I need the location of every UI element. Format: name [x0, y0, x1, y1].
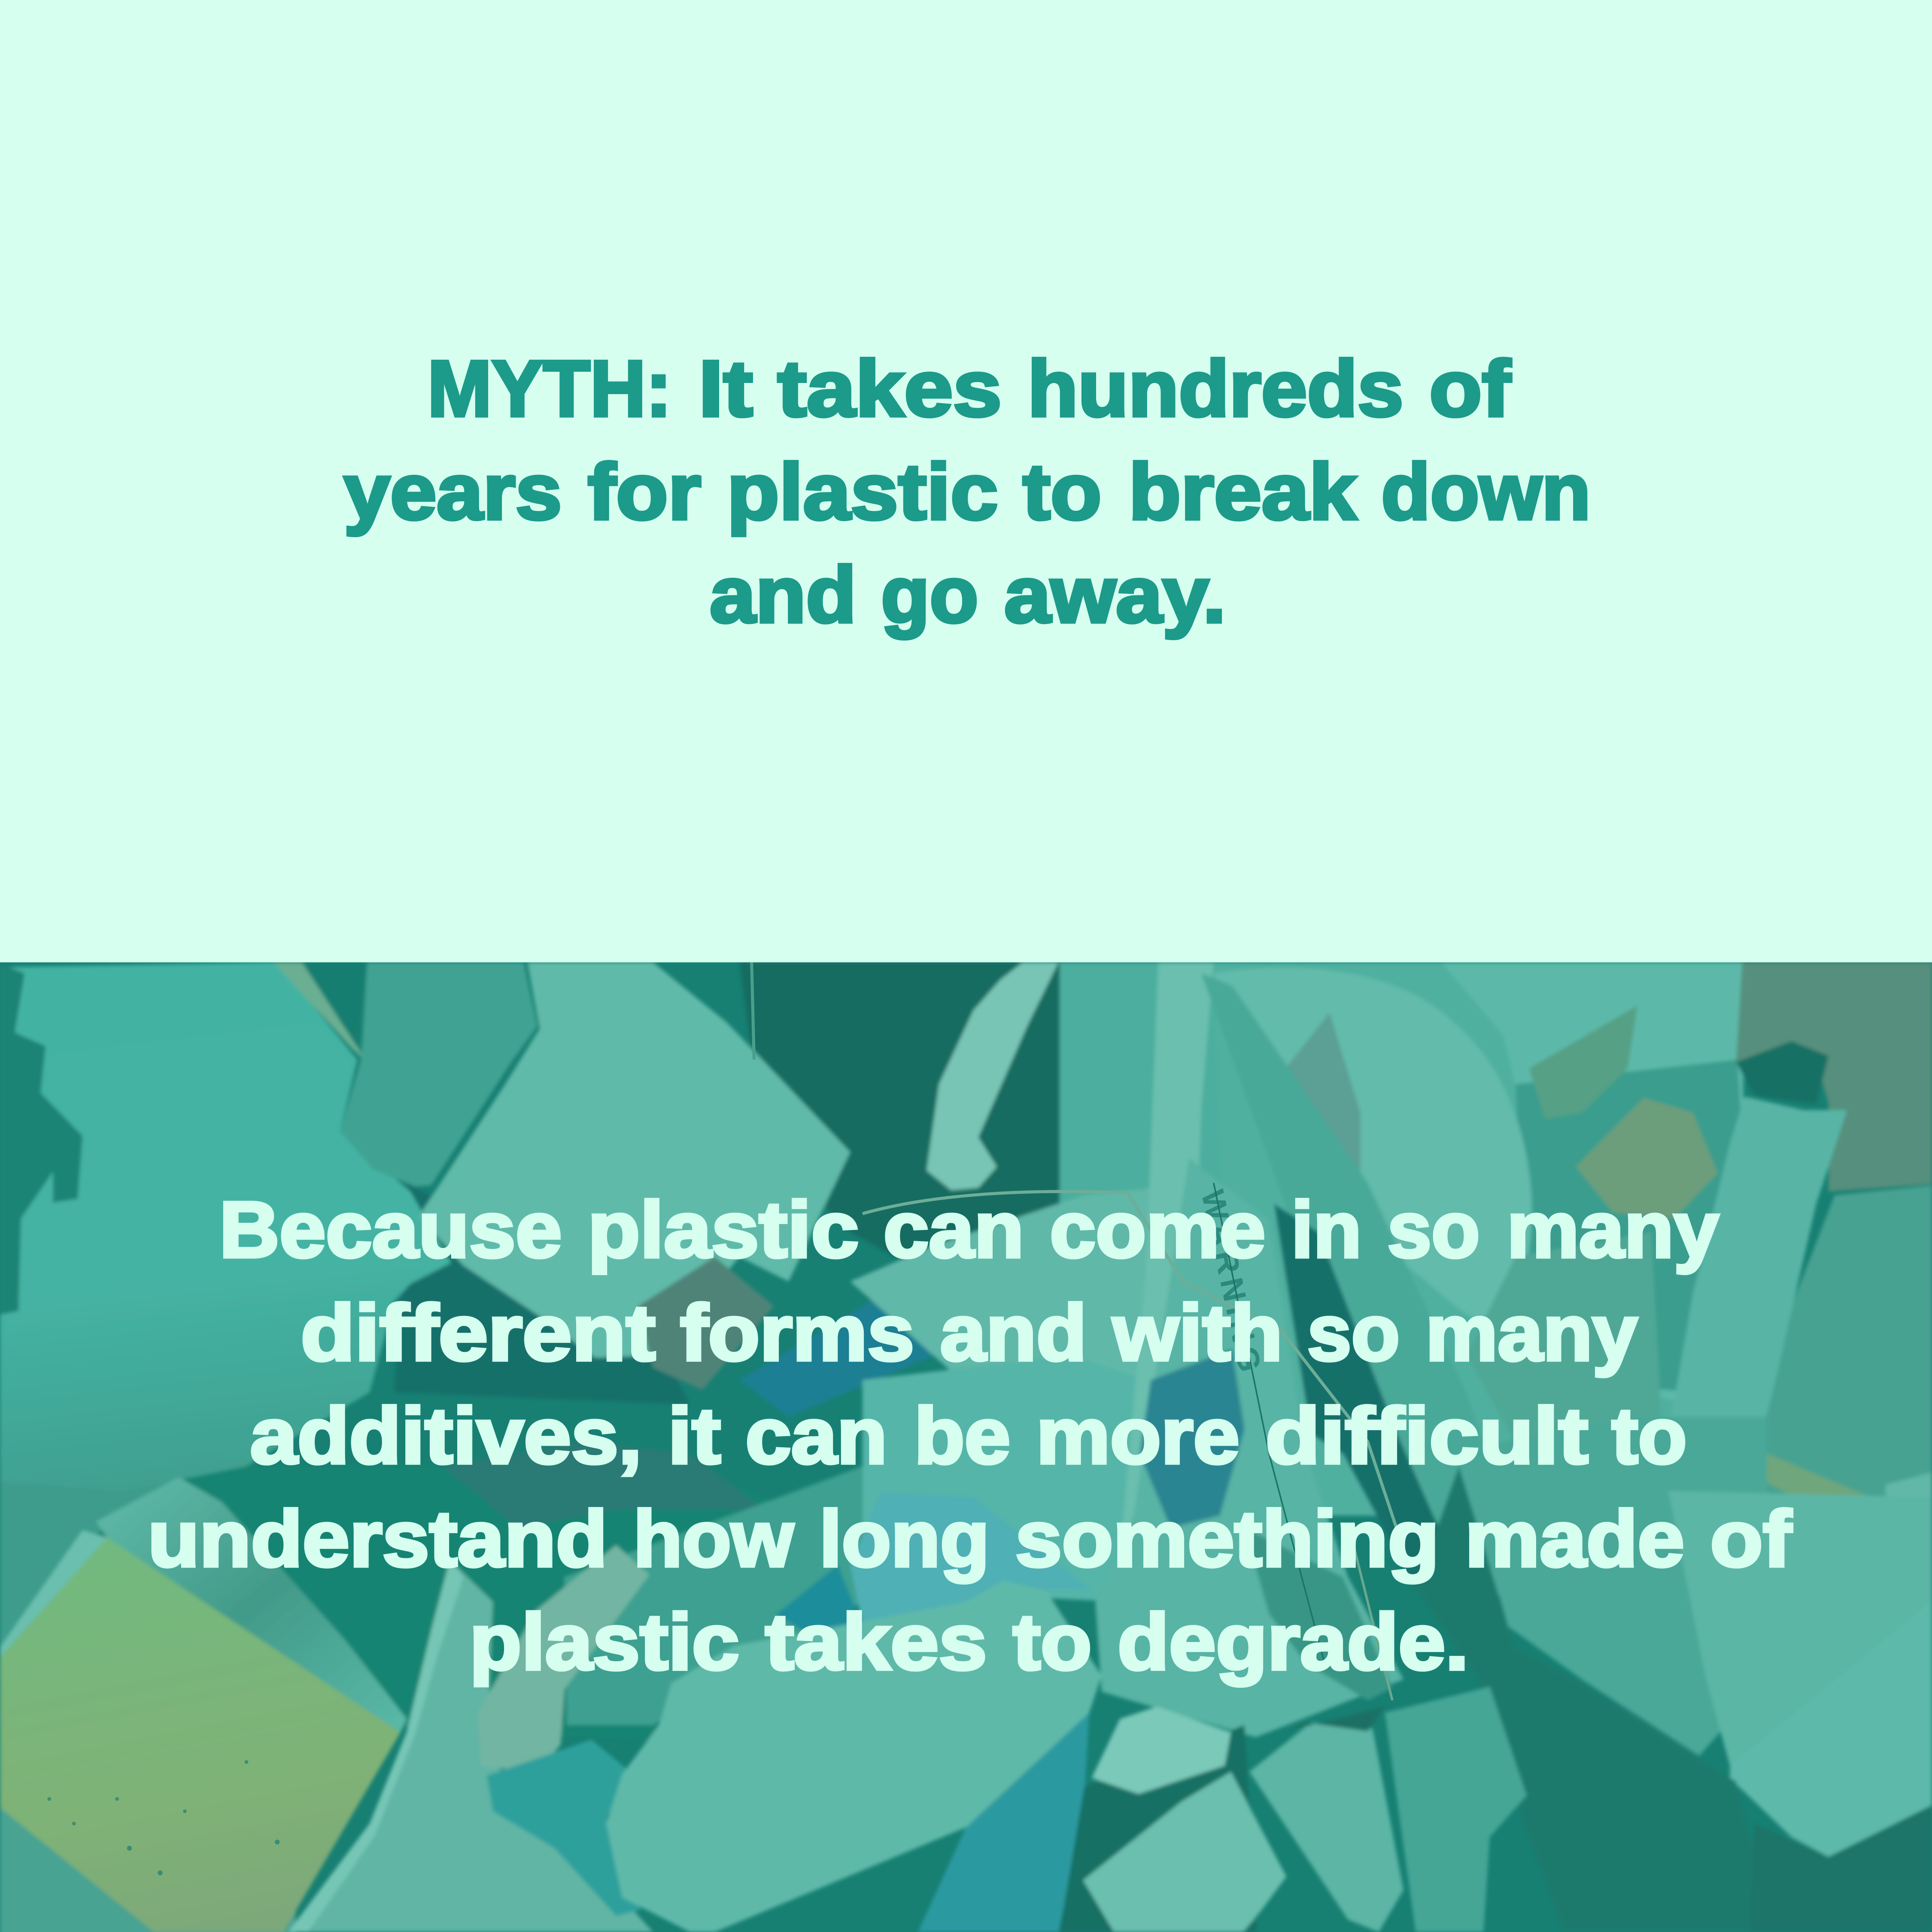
debris: label paper with print [1095, 1158, 1403, 1738]
debris: red fragment [638, 1257, 774, 1390]
debris: blue bag [918, 1713, 1089, 1932]
debris: printed word on paper: WARNING [1195, 1187, 1268, 1375]
body text: difficult [1265, 1391, 1588, 1480]
body text: different [301, 1288, 656, 1377]
top panel: pale mint background [0, 0, 1932, 962]
debris: brush and pale paper [1459, 1417, 1767, 1756]
debris: yellow shard [1529, 1005, 1637, 1119]
body text: and [940, 1288, 1087, 1377]
debris: twig [927, 962, 1058, 1190]
debris: yellow sponge [0, 1538, 401, 1932]
body text: to [1013, 1598, 1092, 1686]
body text: takes [765, 1598, 987, 1686]
debris: popcorn foam [1092, 1707, 1231, 1794]
myth heading [344, 344, 1591, 639]
body text: to [1612, 1391, 1687, 1480]
myth heading: go [881, 550, 978, 639]
body text: plastic [588, 1185, 859, 1274]
debris: tube [1249, 1722, 1403, 1932]
debris: dark textured foam [1416, 1466, 1761, 1932]
debris: ribbon and dark strip [1201, 973, 1540, 1602]
body text: more [1036, 1391, 1239, 1480]
debris: left wedge and rim [96, 1477, 407, 1732]
body text: many [1425, 1288, 1637, 1377]
body text: Because [219, 1185, 562, 1274]
body text [148, 1185, 1792, 1686]
debris: large round dish [1214, 968, 1532, 1321]
body text: degrade. [1118, 1598, 1469, 1686]
body text: in [1291, 1185, 1361, 1274]
debris: pale slab [1385, 1687, 1527, 1932]
debris: speckles on sponge [47, 1760, 279, 1875]
debris: large left ball [0, 962, 451, 1491]
body text: additives, [250, 1391, 642, 1480]
body text: can [884, 1185, 1024, 1274]
debris: torn dark patch on ball [0, 963, 82, 1315]
debris: deep background zones [97, 1479, 659, 1741]
debris: dark gaps at bottom [1060, 1725, 1257, 1932]
myth heading: break [1129, 447, 1357, 536]
body text: how [633, 1495, 794, 1583]
debris: brown card, top right [1736, 962, 1932, 1191]
body text: it [668, 1391, 721, 1480]
myth heading: years [344, 447, 562, 536]
body text: be [914, 1391, 1010, 1480]
body text: so [1388, 1185, 1480, 1274]
body text: so [1307, 1288, 1400, 1377]
body text: come [1050, 1185, 1265, 1274]
debris: white strip on right [1651, 1097, 1847, 1628]
photo panel: teal-tinted plastic debris [0, 962, 1932, 1932]
body text: many [1507, 1185, 1719, 1274]
debris: pale foam cluster [1466, 1232, 1663, 1466]
debris: blue fragment [739, 1276, 949, 1417]
debris: blue printed patch [1140, 1349, 1245, 1528]
debris: grey sheet [340, 962, 537, 1187]
body text: made [1465, 1495, 1684, 1583]
myth heading: and [710, 550, 857, 639]
debris: orange foam [1576, 1098, 1718, 1218]
body text: with [1112, 1288, 1283, 1377]
debris: white square [1083, 1772, 1286, 1932]
debris: dark hole [1736, 1041, 1829, 1104]
debris: blue sponge [487, 1740, 641, 1916]
body text: forms [680, 1288, 914, 1377]
body text: of [1710, 1495, 1792, 1583]
myth heading: MYTH: [428, 344, 671, 433]
myth heading: hundreds [1027, 344, 1403, 433]
myth heading: for [588, 447, 701, 536]
debris: crumpled white sheet [419, 962, 850, 1358]
myth heading: plastic [727, 447, 998, 536]
myth heading: down [1381, 447, 1591, 536]
debris: centre pale sheets [850, 1183, 1201, 1417]
body text: plastic [469, 1598, 739, 1686]
body text: can [745, 1391, 887, 1480]
debris: right textured foam [1750, 1185, 1932, 1497]
debris: reed behind ball [273, 962, 364, 1060]
myth heading: away. [1004, 550, 1226, 639]
myth heading: of [1429, 344, 1511, 433]
debris: purple crumple [444, 1442, 764, 1528]
debris: big white foam block [606, 1581, 1102, 1932]
myth heading: It [699, 344, 753, 433]
body text: understand [148, 1495, 608, 1583]
myth heading: takes [778, 344, 1002, 433]
body text: long [819, 1495, 990, 1583]
debris: curved white shell [296, 1560, 653, 1932]
body text: something [1015, 1495, 1439, 1583]
myth heading: to [1023, 447, 1102, 536]
debris: thin wires [752, 962, 1405, 1700]
debris: rough foam [478, 1545, 649, 1773]
debris: pink patch [1274, 1013, 1360, 1212]
